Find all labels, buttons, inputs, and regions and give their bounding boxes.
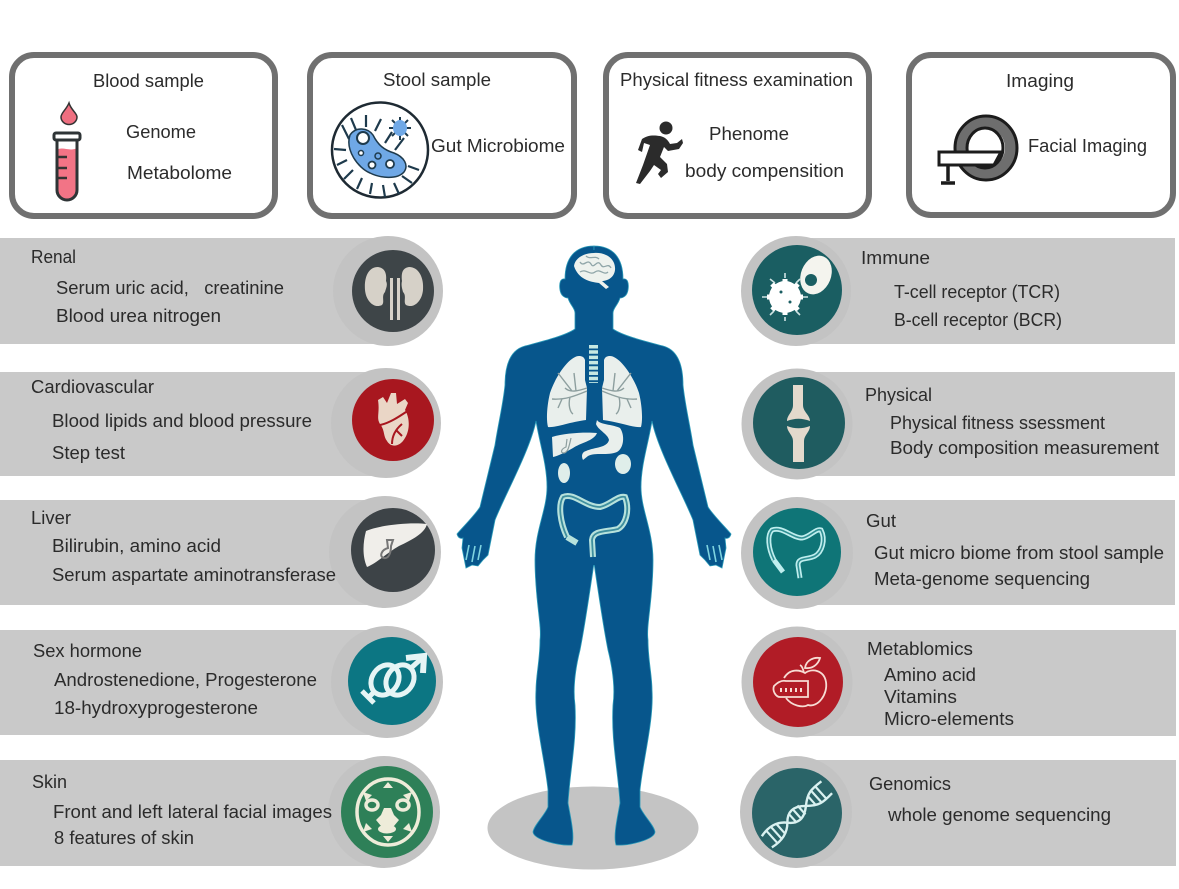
text: sex hormone: 18-hydroxyprogesterone	[54, 698, 258, 718]
text: liver	[31, 508, 336, 585]
text: metablomics: Metablomics	[867, 639, 973, 659]
panel: immune	[741, 236, 1175, 346]
panel: blood sample	[12, 55, 275, 216]
text: liver: Serum aspartate aminotransferase	[52, 565, 336, 585]
heading: stool sample: Stool sample	[383, 70, 491, 90]
text: genomics: whole genome sequencing	[887, 805, 1111, 825]
body silhouette	[457, 246, 731, 845]
icon: gender symbols	[362, 656, 424, 703]
text: genome and metabolome: Metabolome	[127, 163, 232, 183]
text: genomics	[869, 774, 1111, 825]
panel: renal	[0, 236, 443, 346]
text: metablomics: Vitamins	[884, 687, 957, 707]
text: metablomics	[867, 639, 1014, 729]
text: gut: Gut micro biome from stool sample	[874, 543, 1164, 563]
organ: liver	[552, 433, 597, 457]
organ: lungs and trachea	[547, 345, 642, 427]
text: cardiovascular: Blood lipids and blood pressure	[52, 411, 312, 431]
text: skin: Front and left lateral facial images	[53, 802, 332, 822]
text: physical: Physical	[865, 385, 932, 405]
text: physical: Physical fitness ssessment	[890, 413, 1105, 433]
icon: apple with measuring tape	[773, 658, 826, 706]
text: metablomics: Micro-elements	[884, 709, 1014, 729]
text: genomics: Genomics	[869, 774, 951, 794]
panel: stool sample	[310, 55, 574, 216]
panel: skin	[0, 756, 440, 868]
text: sex hormone: Sex hormone	[33, 641, 142, 661]
organ: kidneys	[558, 454, 631, 483]
icon: runner	[636, 122, 683, 184]
text: phenome and body compensition: Phenome	[709, 124, 789, 144]
icon: virus and cell	[762, 251, 837, 321]
text: genome and metabolome: Genome	[126, 122, 196, 142]
text: immune: B-cell receptor (BCR)	[894, 310, 1062, 330]
text: renal: Blood urea nitrogen	[56, 306, 221, 326]
heading: physical fitness examination: Physical fitness examination	[620, 70, 853, 90]
ground shadow ellipse	[488, 786, 698, 870]
icon: colon	[769, 529, 823, 578]
text: sex hormone	[33, 641, 317, 718]
text: renal	[31, 247, 284, 326]
text: physical	[865, 385, 1159, 458]
icon: knee joint bone	[787, 385, 810, 462]
panel: imaging	[909, 55, 1173, 215]
text: liver: Bilirubin, amino acid	[52, 536, 221, 556]
icon: face mask	[357, 779, 419, 845]
panel: liver	[0, 496, 441, 608]
panel: cardiovascular	[0, 368, 441, 478]
icon: liver	[364, 523, 427, 567]
text: genome and metabolome	[126, 122, 232, 183]
icon: test tube with drop	[54, 103, 80, 200]
organ: brain	[574, 253, 615, 289]
text: sex hormone: Androstenedione, Progesterone	[54, 670, 317, 690]
text: gut	[866, 511, 1164, 589]
panel: sex hormone	[0, 626, 443, 738]
panel: physical fitness examination	[606, 55, 869, 216]
text: immune: Immune	[861, 248, 930, 268]
organ: stomach	[582, 420, 623, 460]
text: phenome and body compensition: body compensition	[685, 161, 844, 181]
text: renal: Renal	[31, 247, 76, 267]
text: skin: 8 features of skin	[54, 828, 194, 848]
human body figure	[457, 246, 731, 845]
heading: imaging: Imaging	[1006, 71, 1074, 91]
text: cardiovascular	[31, 377, 312, 463]
hand finger lines	[466, 545, 722, 562]
text: physical: Body composition measurement	[890, 438, 1159, 458]
heading: blood sample: Blood sample	[93, 71, 204, 91]
text: gut: Gut	[866, 511, 896, 531]
icon: microbe	[332, 102, 428, 198]
icon: MRI scanner	[939, 116, 1017, 183]
text: skin: Skin	[32, 772, 67, 792]
text: renal: Serum uric acid, creatinine	[56, 278, 284, 298]
text: immune: T-cell receptor (TCR)	[894, 282, 1060, 302]
panel: genomics	[740, 756, 1176, 868]
text: gut: Meta-genome sequencing	[874, 569, 1090, 589]
panel: metablomics	[742, 626, 1176, 738]
text: skin	[32, 772, 332, 848]
text: cardiovascular: Cardiovascular	[31, 377, 154, 397]
text: metablomics: Amino acid	[884, 665, 976, 685]
text: gut microbiome: Gut Microbiome	[431, 136, 565, 156]
text: liver: Liver	[31, 508, 71, 528]
text: phenome and body compensition	[685, 124, 844, 181]
text: immune	[861, 248, 1062, 330]
icon: heart	[378, 393, 409, 446]
icon: DNA helix	[761, 781, 833, 848]
panel: physical	[742, 368, 1175, 480]
text: facial imaging: Facial Imaging	[1028, 136, 1147, 156]
panel: gut	[741, 497, 1175, 609]
text: cardiovascular: Step test	[52, 443, 125, 463]
icon: kidneys	[365, 267, 423, 320]
organ: colon	[560, 496, 627, 557]
